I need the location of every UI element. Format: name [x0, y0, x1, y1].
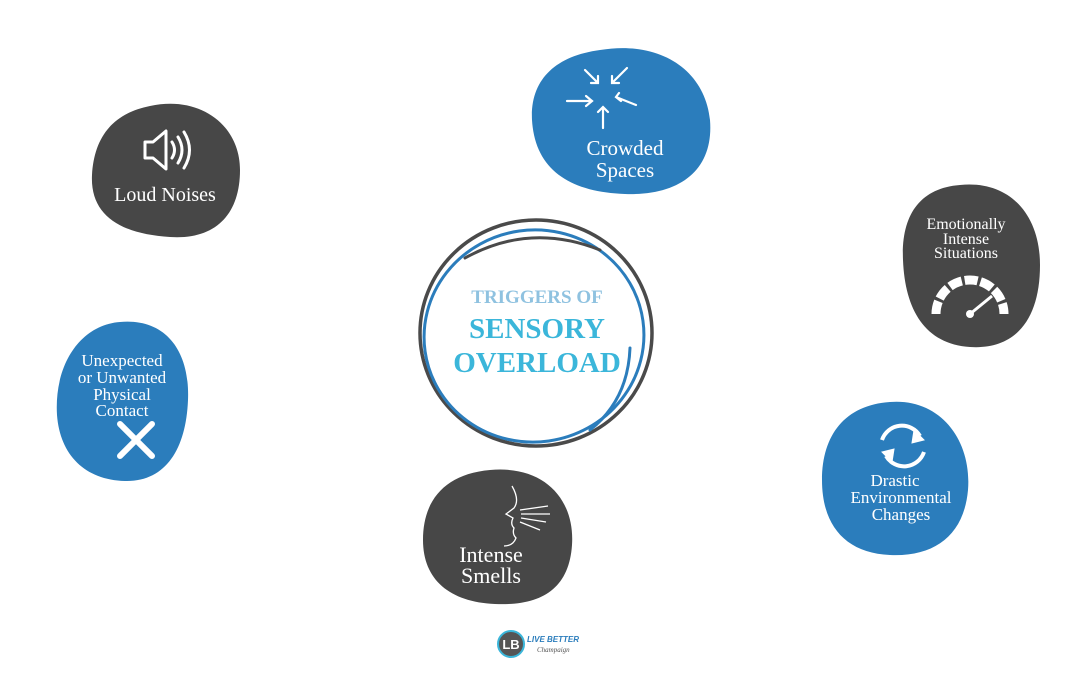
center circle title [410, 216, 658, 456]
label: Intense Smells: Intense [459, 542, 523, 567]
icon: gauge [936, 280, 1004, 318]
panel: drastic environmental changes [822, 402, 968, 555]
panel: emotionally intense situations: Situations [934, 245, 998, 262]
panel: emotionally intense situations: Intense [943, 231, 989, 248]
panel: unexpected physical contact: or Unwanted [78, 368, 167, 387]
panel: emotionally intense situations [903, 185, 1040, 347]
icon: refresh arrows [882, 426, 924, 466]
panel: drastic environmental changes: Environmental [850, 488, 952, 507]
panel: unexpected physical contact [57, 322, 188, 481]
panel: unexpected physical contact: Contact [96, 401, 149, 420]
icon: speaker [145, 131, 190, 169]
center circle title: OVERLOAD [453, 347, 621, 379]
label: Drastic Environmental Changes: Drastic [870, 471, 920, 490]
label: Loud Noises: Loud Noises [114, 184, 216, 206]
icon: X [120, 424, 152, 456]
panel: crowded spaces [532, 48, 710, 194]
label: Emotionally Intense Situations: Emotionally [926, 216, 1006, 233]
panel: crowded spaces: Spaces [596, 158, 654, 182]
title text: TRIGGERS OF [471, 287, 603, 308]
panel: intense smells: Smells [461, 563, 521, 588]
panel: drastic environmental changes: Changes [872, 505, 930, 524]
logo: Champaign [537, 646, 570, 654]
panel: loud noises [92, 104, 240, 237]
panel: intense smells [423, 470, 572, 604]
center circle title: SENSORY [469, 313, 605, 345]
logo: LB [502, 637, 520, 652]
label: Unexpected or Unwanted Physical Contact: Unexpected [81, 351, 163, 370]
icon: converging arrows [567, 68, 636, 128]
icon: face smelling [504, 486, 550, 546]
logo [498, 631, 579, 657]
label: Crowded Spaces: Crowded [586, 136, 664, 160]
logo: LIVE BETTER [527, 635, 579, 644]
panel: unexpected physical contact: Physical [93, 385, 151, 404]
